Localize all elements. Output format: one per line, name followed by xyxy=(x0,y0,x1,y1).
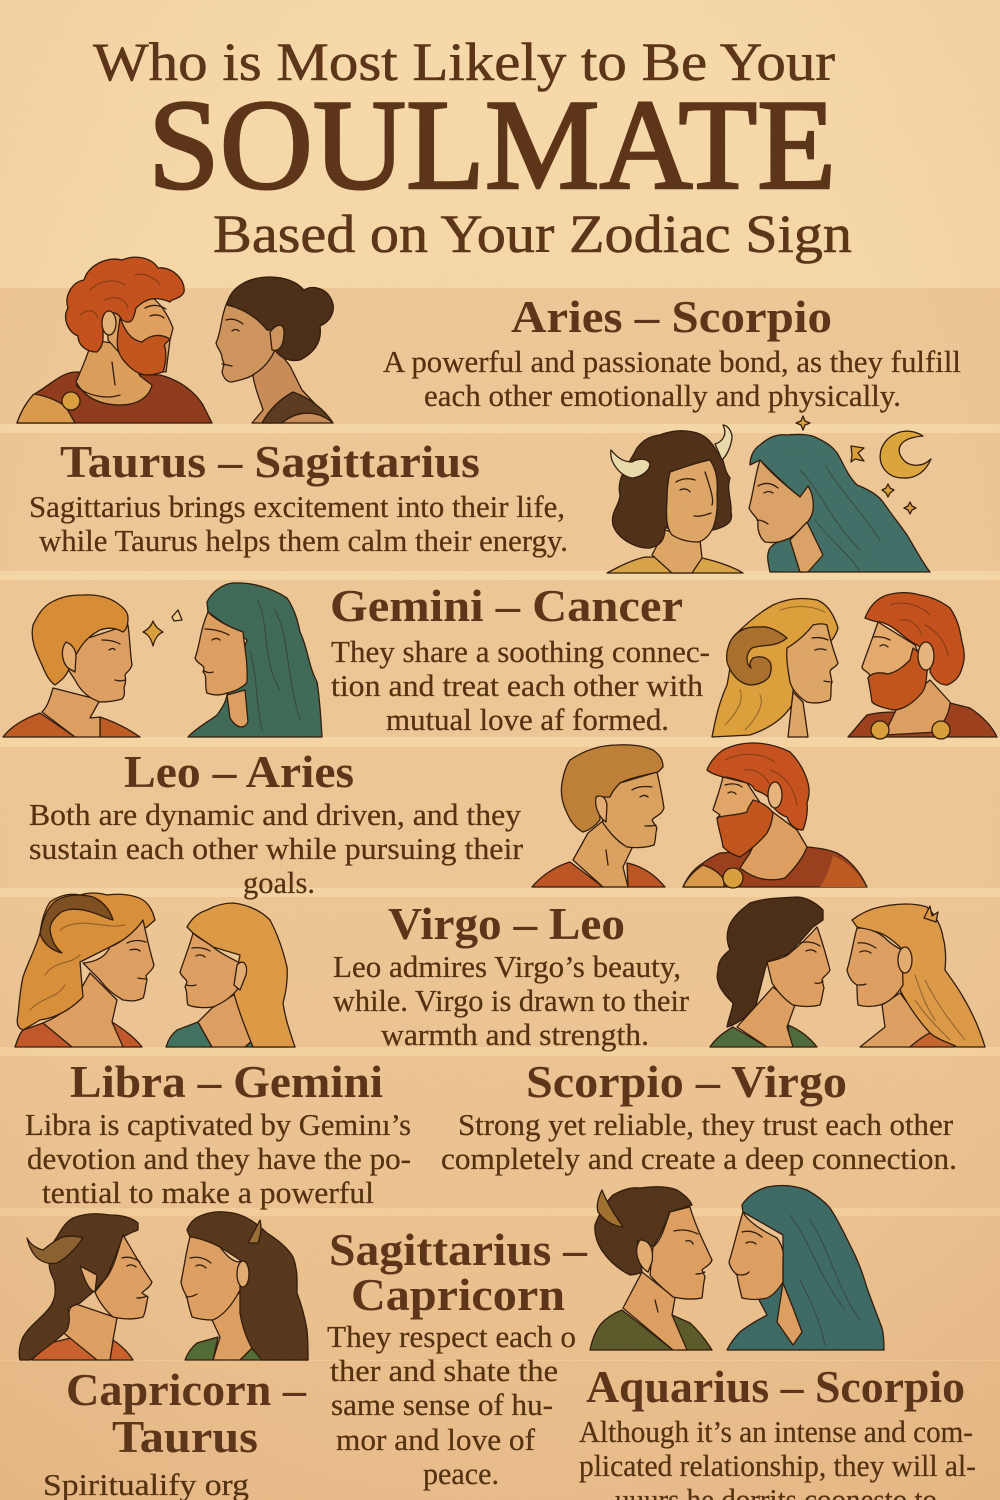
illustration: Leo woman xyxy=(166,903,295,1047)
illustration: Capricorn woman xyxy=(19,1214,152,1360)
illustration: Aries man right xyxy=(848,593,997,739)
heading: Virgo – Leo xyxy=(388,899,625,949)
heading: Aries – Scorpio xyxy=(511,292,832,342)
description: mor and love of xyxy=(336,1422,536,1457)
illustration: Sagittarius woman xyxy=(749,416,931,572)
description: same sense of hu- xyxy=(331,1387,553,1422)
panel: Libra and Gemini xyxy=(25,1057,411,1210)
title: Who is Most Likely to Be Your xyxy=(93,32,835,92)
illustration: Virgo woman xyxy=(710,897,830,1047)
description: tion and treat each other with xyxy=(331,668,704,703)
description xyxy=(25,1107,411,1210)
illustration: Aries man xyxy=(683,743,867,888)
description: plicated relationship, they will al- xyxy=(579,1448,976,1483)
panel: Taurus and Sagittarius xyxy=(29,416,931,573)
description: sustain each other while pursuing their xyxy=(29,831,524,866)
description: peace. xyxy=(423,1456,499,1491)
panel: Gemini and Cancer xyxy=(3,581,997,739)
description: Leo admires Virgo’s beauty, xyxy=(333,949,681,984)
icon: small sparkle xyxy=(172,610,182,621)
description: They respect each o xyxy=(327,1319,576,1354)
illustration: Taurus woman right xyxy=(181,1212,308,1360)
illustration: Leo man xyxy=(532,745,665,887)
panel: Virgo and Leo xyxy=(15,893,985,1052)
description: ther and shate the xyxy=(330,1353,558,1388)
heading: Taurus xyxy=(112,1412,258,1462)
illustration: Taurus man xyxy=(607,425,743,573)
heading: Leo – Aries xyxy=(124,747,354,797)
description: Libra is captivated by Geminı’s xyxy=(25,1107,411,1142)
description xyxy=(441,1107,957,1176)
illustration: Cancer woman xyxy=(188,583,322,737)
description: Strong yet reliable, they trust each other xyxy=(458,1107,954,1142)
illustration: Scorpio woman xyxy=(216,277,333,423)
heading: Libra – Gemini xyxy=(70,1057,383,1107)
icon: sparkle xyxy=(143,621,163,646)
heading: Capricorn – xyxy=(66,1365,307,1415)
icon: moon and stars xyxy=(796,416,931,514)
description: Sagittarius brings excitement into their life, xyxy=(29,489,565,524)
heading: Gemini – Cancer xyxy=(330,581,683,631)
panel: Aries and Scorpio xyxy=(17,257,961,423)
title xyxy=(93,32,852,264)
panel: Capricorn and Taurus xyxy=(19,1212,308,1500)
panel: Sagittarius and Capricorn xyxy=(327,1186,884,1491)
description xyxy=(29,489,568,558)
description: Although it’s an intense and com- xyxy=(579,1414,973,1449)
illustration: Sagittarius woman xyxy=(590,1187,712,1350)
description xyxy=(331,634,710,737)
description: each other emotionally and physically. xyxy=(424,378,901,413)
description: while Taurus helps them calm their energy. xyxy=(39,523,568,558)
description xyxy=(327,1319,576,1491)
description: while. Virgo is drawn to their xyxy=(333,983,690,1018)
heading: Sagittarius – xyxy=(329,1225,588,1275)
heading: Taurus – Sagittarius xyxy=(60,437,480,487)
title: SOULMATE xyxy=(148,73,836,216)
description xyxy=(333,949,690,1052)
title: Based on Your Zodiac Sign xyxy=(213,204,852,264)
description xyxy=(579,1414,976,1500)
description: A powerful and passionate bond, as they fulfill xyxy=(383,344,961,379)
panel: Scorpio and Virgo xyxy=(441,1057,957,1176)
description xyxy=(383,344,961,413)
panel: Leo and Aries xyxy=(29,743,867,900)
description: mutual love af formed. xyxy=(386,702,669,737)
illustration: Gemini man xyxy=(3,595,182,737)
description: Both are dynamic and driven, and they xyxy=(29,797,522,832)
description: completely and create a deep connection. xyxy=(441,1141,957,1176)
heading: Capricorn xyxy=(351,1270,565,1320)
heading xyxy=(329,1225,588,1320)
description xyxy=(29,797,524,900)
heading xyxy=(66,1365,307,1462)
description: goals. xyxy=(243,865,315,900)
illustration: Taurus woman xyxy=(15,893,155,1047)
illustration: Scorpio woman xyxy=(727,1186,884,1350)
illustration: Leo woman right xyxy=(847,904,985,1047)
illustration: Aries man xyxy=(17,257,212,423)
heading: Scorpio – Virgo xyxy=(526,1057,847,1107)
description: warmth and strength. xyxy=(381,1017,649,1052)
description: They share a soothing connec- xyxy=(331,634,710,669)
illustration: Aries woman with ram horn xyxy=(712,598,838,737)
panel: Aquarius and Scorpio xyxy=(579,1362,976,1500)
description: tential to make a powerful xyxy=(42,1175,374,1210)
description: devotion and they have the po- xyxy=(27,1141,411,1176)
heading: Aquarius – Scorpio xyxy=(586,1362,965,1412)
